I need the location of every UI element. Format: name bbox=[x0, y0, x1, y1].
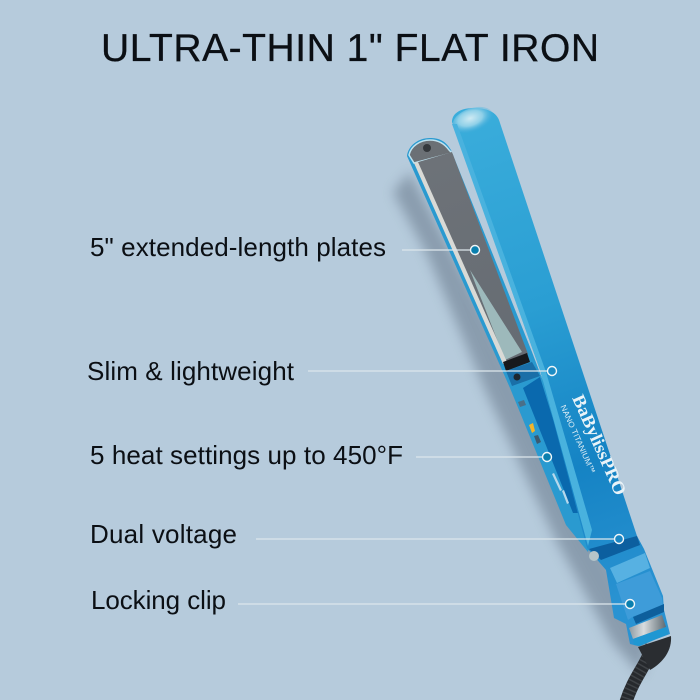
flat iron illustration bbox=[393, 102, 671, 700]
hinge block bbox=[506, 362, 540, 386]
callout: plates bbox=[90, 232, 480, 262]
label: Dual voltage bbox=[90, 519, 237, 549]
callout: dual voltage bbox=[90, 519, 624, 549]
label: Slim & lightweight bbox=[87, 356, 295, 386]
arm edge highlight bbox=[452, 124, 592, 546]
heat plate bbox=[415, 152, 528, 362]
callout: heat settings bbox=[90, 440, 552, 470]
callout: slim bbox=[87, 356, 556, 386]
brand text: NANO TITANIUM™ bbox=[559, 404, 597, 475]
leader line bbox=[256, 538, 615, 540]
title: ULTRA-THIN 1" FLAT IRON bbox=[101, 27, 599, 70]
leader line bbox=[416, 456, 543, 458]
brand text: BaBylissPRO bbox=[568, 391, 631, 498]
collar ring bbox=[629, 615, 666, 639]
inner blue channel bbox=[523, 377, 582, 513]
marker bbox=[542, 452, 552, 462]
label: 5" extended-length plates bbox=[90, 232, 386, 262]
power cord bbox=[626, 636, 671, 700]
marker bbox=[626, 600, 634, 608]
label: 5 heat settings up to 450°F bbox=[90, 440, 403, 470]
heat settings buttons bbox=[518, 400, 569, 504]
leader line bbox=[308, 370, 548, 372]
leader line bbox=[238, 603, 626, 605]
lower arm with plate bbox=[407, 138, 596, 552]
iron shadow bbox=[393, 172, 650, 676]
highlight on tip bbox=[449, 102, 497, 138]
callout: locking clip bbox=[91, 585, 634, 615]
marker bbox=[614, 534, 624, 544]
locking clip assembly bbox=[589, 536, 664, 624]
marker bbox=[470, 246, 480, 254]
label: Locking clip bbox=[91, 585, 226, 615]
marker bbox=[548, 366, 556, 376]
upper arm body bbox=[452, 108, 670, 646]
leader line bbox=[402, 249, 471, 251]
